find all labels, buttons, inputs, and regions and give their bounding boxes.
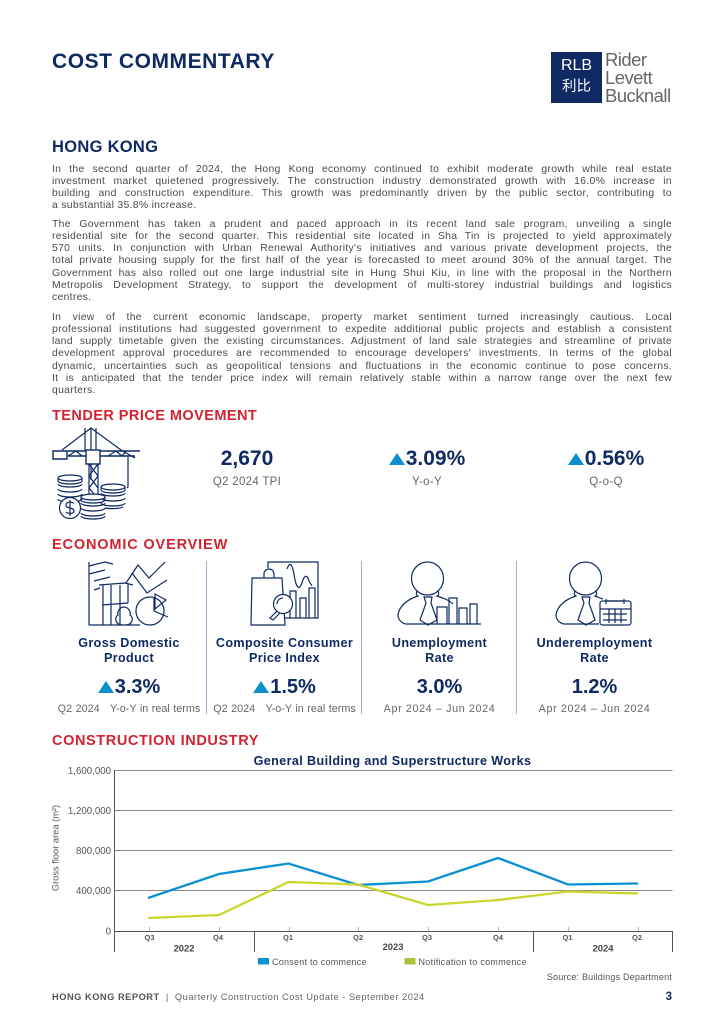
text block: paragraph 3: It is anticipated that the tender price index will remain relatively stable within a narrow range over the next few (52, 373, 672, 384)
line chart: gross floor area: 1,600,000 (68, 766, 112, 777)
text block: paragraph 3: professional institutions had suggested government to expedite additional public projects and establish a consistent (52, 324, 672, 335)
source note: Source: Buildings Department (547, 972, 672, 982)
logo: Rider Levett Bucknall: Rider (605, 49, 646, 70)
panel: CCPI (213, 636, 356, 715)
heading: construction industry: CONSTRUCTION INDUSTRY (52, 733, 259, 749)
panel: GDP: Gross Domestic (78, 636, 180, 650)
divider (361, 561, 362, 714)
panel: unemployment rate: 3.0% (417, 676, 462, 698)
panel: CCPI: Q2 2024 Y-o-Y in real terms (213, 703, 356, 715)
text block: paragraph 2: Metropolis Development Strategy, to support the development of multi-storey industrial buildings and logistics (52, 280, 672, 291)
title: COST COMMENTARY (52, 50, 275, 73)
panel: CCPI: Price Index (249, 651, 320, 665)
text block: paragraph 2 (52, 218, 672, 303)
text block: paragraph 2: The Government has taken a prudent and paced approach in its recent land sale program, unveiling a single (52, 218, 672, 230)
stat: quarter on quarter: 0.56% (585, 447, 644, 470)
line chart: gross floor area: 2024 (593, 942, 614, 954)
text block: paragraph 2: residential site for the second quarter. This residential site located in Sha Tin is projected to yield approximately (52, 231, 672, 242)
logo: Rider Levett Bucknall: 利比 (562, 75, 591, 96)
panel: GDP (58, 636, 200, 715)
line chart: gross floor area: Q1 (283, 933, 293, 942)
divider (206, 561, 207, 714)
text block: paragraph 1: In the second quarter of 2024, the Hong Kong economy continued to exhibit moderate growth while real estate (52, 164, 672, 175)
panel: underemployment rate: Rate (580, 651, 609, 665)
series: notification to commence (148, 882, 638, 918)
line chart: gross floor area: Q2 (353, 933, 363, 942)
text block: paragraph 2: centres. (52, 292, 91, 303)
stat: year on year: 3.09% (406, 447, 465, 470)
line chart: gross floor area: Q1 (562, 933, 573, 942)
text block: paragraph 3 (52, 312, 672, 396)
logo: Rider Levett Bucknall (551, 49, 671, 106)
line chart: gross floor area: Q3 (422, 933, 432, 942)
line chart: gross floor area: Q4 (213, 933, 224, 942)
text block: paragraph 2: 570 units. In conjunction with Urban Renewal Authority's initiatives and various private development projects, the (52, 243, 672, 254)
line chart: gross floor area: 400,000 (76, 886, 112, 897)
text block: paragraph 1: a substantial 35.8% increase. (52, 200, 196, 210)
panel: unemployment rate: Rate (425, 651, 454, 665)
logo: Rider Levett Bucknall: Levett (605, 67, 652, 88)
line chart: gross floor area: Q3 (144, 933, 155, 942)
stat: quarter on quarter: Q-o-Q (589, 476, 623, 488)
stat: TPI: 2,670 (221, 447, 273, 470)
panel: GDP: Product (104, 651, 154, 665)
text block: paragraph 3: land supply timetable given the existing circumstances. Adjustment of land sale strategies and streamline of private (52, 336, 672, 347)
panel: unemployment rate: Unemployment (392, 636, 487, 650)
chart title: General Building and Superstructure Works (254, 754, 531, 768)
series: consent to commence (148, 858, 638, 898)
panel: underemployment rate: Apr 2024 – Jun 2024 (539, 703, 650, 715)
line chart: gross floor area: Gross floor area (m²) (50, 805, 60, 891)
panel: underemployment rate: Underemployment (537, 636, 652, 650)
page number: 3 (666, 991, 672, 1003)
panel: CCPI: 1.5% (270, 676, 316, 698)
text block: paragraph 1: building and construction expenditure. This growth was predominantly driven by the public sector, contributing to (52, 188, 672, 199)
text block: paragraph 3: In view of the current economic landscape, property market sentiment turned increasingly cautious. Local (52, 312, 672, 322)
heading: economic overview: ECONOMIC OVERVIEW (52, 537, 228, 553)
stat: TPI: Q2 2024 TPI (213, 476, 281, 488)
line chart: gross floor area: 2023 (383, 941, 403, 952)
text block: paragraph 2: total private housing supply for the first half of the year is forecasted to meet around 30% of the annual target. The (52, 255, 672, 266)
text block: paragraph 3: dynamic, uncertainties such as geopolitical tensions and fluctuations in the economic continue to pose concerns. (52, 361, 672, 372)
line chart: gross floor area: Q4 (493, 933, 504, 942)
stat: TPI (213, 447, 281, 488)
divider (516, 561, 517, 714)
text block: paragraph 2: Government has also rolled out one large industrial site in Hung Shui Kiu, in line with the proposal in the Northern (52, 268, 672, 279)
text block: paragraph 3: development approval procedures are recommended to encourage developers' investments. In terms of the global (52, 348, 672, 359)
line chart: gross floor area: 800,000 (76, 846, 112, 857)
legend: consent to commence: Consent to commence (272, 957, 367, 967)
logo: Rider Levett Bucknall: RLB (561, 57, 592, 74)
stat: year on year (389, 447, 465, 488)
text block: paragraph 3: quarters. (52, 385, 96, 396)
panel: GDP: Q2 2024 Y-o-Y in real terms (58, 703, 200, 715)
panel: unemployment rate (384, 636, 495, 715)
line chart: gross floor area: 0 (106, 926, 112, 938)
line chart: gross floor area: 2022 (174, 942, 194, 954)
heading: tender price movement: TENDER PRICE MOVEMENT (52, 408, 257, 424)
panel: unemployment rate: Apr 2024 – Jun 2024 (384, 703, 495, 715)
stat: quarter on quarter (568, 447, 644, 488)
line chart: gross floor area: Q2 (632, 933, 642, 942)
panel: underemployment rate: 1.2% (572, 676, 617, 698)
footer: HONG KONG REPORT | Quarterly Construction Cost Update - September 2024 (52, 992, 425, 1002)
panel: GDP: 3.3% (115, 676, 160, 698)
text block: paragraph 1: investment market quietened progressively. The construction industry demonstrated growth with 16.0% increase in (52, 176, 672, 187)
legend: notification to commence: Notification to commence (418, 957, 527, 967)
panel: CCPI: Composite Consumer (216, 636, 353, 650)
heading: Hong Kong: HONG KONG (52, 138, 158, 156)
logo: Rider Levett Bucknall: Bucknall (605, 85, 671, 106)
panel: underemployment rate (537, 636, 652, 715)
line chart: gross floor area: 1,200,000 (68, 806, 112, 817)
stat: year on year: Y-o-Y (412, 476, 442, 488)
text block: paragraph 1 (52, 164, 672, 210)
